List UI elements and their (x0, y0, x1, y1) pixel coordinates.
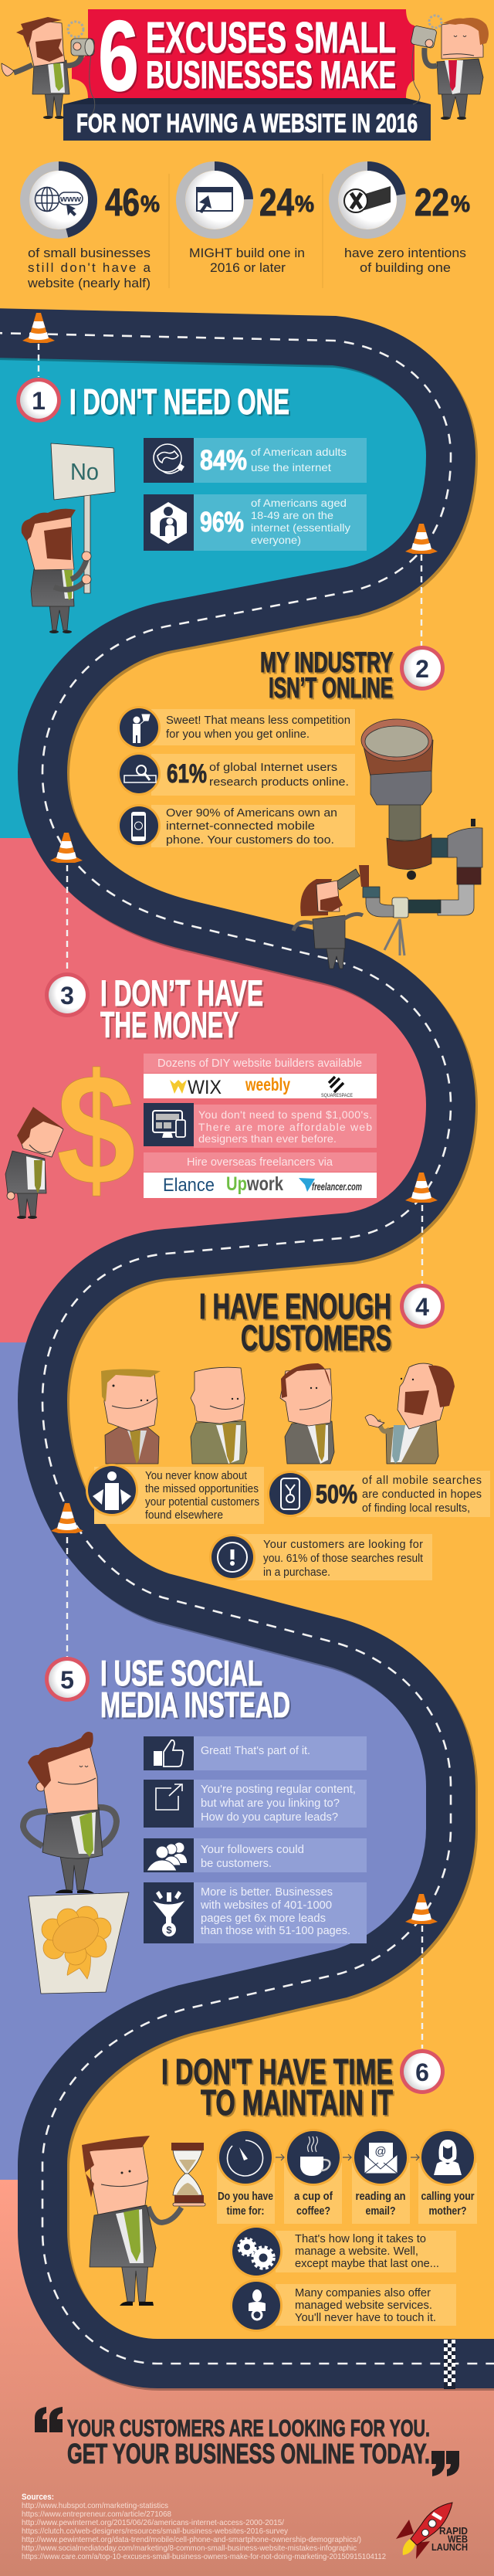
heading 3 (100, 972, 263, 1045)
badge 1 (16, 378, 61, 423)
heading 4: CUSTOMERS (241, 1318, 391, 1358)
caption: 46 percent (27, 246, 151, 290)
step: calling your mother: calling your (421, 2190, 475, 2203)
closing quote mark (431, 2451, 459, 2476)
background: salmon footer (0, 2180, 494, 2576)
step: do you have time for: Do you have (218, 2190, 273, 2203)
heading 3: THE MONEY (100, 1004, 239, 1045)
step: reading an email: @ (374, 2145, 387, 2158)
section 3: I don't have the money (5, 972, 377, 1219)
panel: overseas freelancers: Hire overseas freelancers via (187, 1156, 333, 1169)
stat: 24 percent: % (295, 192, 314, 217)
sources list: http://www.hubspot.com/marketing-statistics (22, 2501, 168, 2510)
sources list: https://www.care.com/a/top-10-excuses-small-business-owners-make-for-not-doing-marketing-20150915104112 (22, 2552, 386, 2561)
row: thumbs up: Great! That's part of it. (201, 1744, 310, 1757)
background: pink section (0, 838, 451, 1342)
stat: 24 percent: 24 (259, 181, 294, 224)
Rapid Web Launch logo: RAPID (439, 2525, 468, 2537)
row: followers: Your followers could (201, 1843, 304, 1856)
step: reading an email: reading an (355, 2190, 406, 2203)
cartoon: man holding hourglass (82, 2136, 205, 2306)
badge 6: 6 (415, 2058, 429, 2086)
row: 50% mobile searches: 50% (316, 1480, 357, 1509)
row: posting content: How do you capture leads? (201, 1811, 338, 1824)
row: followers: be customers. (201, 1857, 272, 1870)
row: 61% research products: research products online. (209, 776, 349, 789)
stat box: 96%: everyone) (251, 534, 301, 546)
stat: 22 percent: 22 (414, 181, 449, 224)
opening quote mark (35, 2407, 63, 2432)
donut: 22% (333, 166, 401, 234)
row: more is better (144, 1882, 367, 1943)
stat: 22 percent: % (451, 192, 470, 217)
row: missed opportunities: your potential customers (145, 1496, 259, 1509)
traffic cone 1 (22, 313, 55, 343)
row: less competition: Sweet! That means less competition (166, 714, 350, 727)
panel: DIY website builders: Dozens of DIY website builders available (157, 1057, 362, 1070)
row: 50% mobile searches: of all mobile searches (362, 1475, 482, 1487)
row: 50% mobile searches: are conducted in hopes (362, 1488, 482, 1501)
panel: DIY website builders: WIX (188, 1077, 222, 1098)
row: 50% mobile searches: of finding local results, (362, 1502, 470, 1515)
row: customers looking: Your customers are looking for (263, 1539, 423, 1551)
background: purple section (0, 1342, 451, 2180)
sources list: http://www.pewinternet.org/2015/06/26/americans-internet-access-2000-2015/ (22, 2518, 284, 2527)
badge 4: 4 (415, 1293, 429, 1321)
heading 2: ISN’T ONLINE (269, 672, 393, 704)
row: more is better: pages get 6x more leads (201, 1912, 326, 1925)
sources list (22, 2493, 386, 2561)
section 2: my industry isn't online (117, 646, 482, 969)
caption: 22 percent (344, 246, 466, 275)
badge 3 (45, 972, 90, 1017)
badge 5 (45, 1657, 90, 1702)
row: thumbs up (144, 1736, 367, 1770)
caption: 24 percent: 2016 or later (210, 260, 286, 275)
step: do you have time for (217, 2129, 275, 2224)
panel: affordable designers (144, 1103, 377, 1148)
panel: affordable designers: You don't need to spend $1,000's. (198, 1108, 372, 1121)
badge 6 (400, 2049, 445, 2094)
checkered finish line (444, 2340, 455, 2389)
section 1: I don't need one (16, 378, 367, 633)
stat: 46 percent: 46 (105, 181, 140, 224)
caption: 22 percent: have zero intentions (344, 246, 466, 260)
stat box: 96%: 18-49 are on the (251, 509, 333, 521)
heading 6: TO MAINTAIN IT (201, 2082, 393, 2123)
badge 2: 2 (415, 655, 429, 683)
panel: overseas freelancers (144, 1152, 377, 1198)
Rapid Web Launch logo: LAUNCH (431, 2541, 468, 2553)
traffic cone 6 (405, 1894, 438, 1924)
heading 6 (161, 2052, 393, 2123)
step: do you have time for: time for: (227, 2204, 264, 2218)
sources list: http://www.socialmediatoday.com/marketing/8-common-small-business-website-mistakes-infographic (22, 2544, 357, 2553)
step: calling your mother (418, 2129, 477, 2224)
donut: 24% (181, 166, 249, 234)
illustration: telescope and man (293, 719, 482, 969)
heading 5: MEDIA INSTEAD (100, 1685, 290, 1725)
winding road (0, 333, 494, 2366)
caption: 46 percent: still don't have a (28, 260, 151, 275)
traffic cone 5 (51, 1503, 83, 1533)
stat box: 84%: 84% (200, 444, 247, 476)
cartoon: unimpressed man with tin can (411, 15, 489, 120)
cartoon: man holding No sign: No (70, 458, 99, 485)
caption: 22 percent: of building one (360, 260, 451, 275)
panel: overseas freelancers: Elance (163, 1175, 215, 1196)
row: mobile phones: phone. Your customers do too. (166, 833, 334, 847)
row: how long it takes: except maybe that last one... (295, 2257, 439, 2270)
row: more is better: $ (166, 1924, 172, 1936)
row: missed opportunities: the missed opportunities (145, 1483, 259, 1495)
stat box: 96% (144, 494, 367, 551)
row: posting content (144, 1780, 367, 1828)
row: customers looking (209, 1534, 432, 1580)
row: managed services: You'll never have to touch it. (295, 2311, 436, 2324)
stat box: 84%: of American adults (251, 446, 347, 458)
heading 3: I DON’T HAVE (100, 972, 263, 1013)
row: managed services: managed website services. (295, 2299, 432, 2312)
heading 4 (199, 1286, 391, 1358)
row: customers looking: you. 61% of those searches result (263, 1553, 423, 1565)
step: reading an email (352, 2129, 410, 2224)
donut: 46% (25, 166, 93, 234)
dollar sign: $ (56, 1041, 136, 1218)
step: cup of coffee (284, 2129, 342, 2224)
heading 5: I USE SOCIAL (100, 1653, 262, 1693)
step: cup of coffee: coffee? (296, 2204, 330, 2218)
background: teal section (0, 333, 451, 838)
Rapid Web Launch logo (396, 2503, 468, 2559)
heading 5 (100, 1653, 290, 1725)
sources list: Sources: (22, 2493, 54, 2502)
closing quote (35, 2407, 459, 2476)
row: 50% mobile searches (267, 1471, 490, 1517)
row: 61% research products: 61% (167, 759, 207, 789)
row: more is better: than those with 51-100 pages. (201, 1924, 350, 1937)
traffic cone 2 (405, 524, 438, 554)
statistics row (25, 166, 470, 290)
panel: DIY website builders (144, 1054, 377, 1098)
step: calling your mother: mother? (429, 2204, 466, 2218)
row: followers (144, 1838, 367, 1872)
stat box: 96%: internet (essentially (251, 521, 350, 534)
heading 1: I DON'T NEED ONE (69, 382, 289, 422)
badge 5: 5 (60, 1666, 74, 1694)
badge 1: 1 (32, 387, 46, 415)
row: missed opportunities (86, 1464, 264, 1524)
badge 3: 3 (60, 982, 74, 1010)
customer B (191, 1367, 247, 1464)
panel: overseas freelancers: freelancer.com (312, 1180, 362, 1193)
title banner (63, 0, 431, 141)
heading 2: MY INDUSTRY (260, 647, 393, 678)
badge 4 (400, 1284, 445, 1329)
cartoon: shouting man with tin can (2, 17, 95, 120)
row: missed opportunities: found elsewhere (145, 1509, 223, 1522)
caption: 24 percent (189, 246, 305, 275)
row: mobile phones: Over 90% of Americans own an (166, 806, 337, 820)
section 6: I don't have time to maintain it (82, 2049, 477, 2332)
row: missed opportunities: You never know about (145, 1470, 247, 1482)
row: 61% research products: of global Internet users (209, 761, 337, 774)
sources list: http://www.pewinternet.org/data-trend/mobile/cell-phone-and-smartphone-ownership-demographics/) (22, 2535, 361, 2544)
sources list: https://clutch.co/web-designers/resources/small-business-websites-2016-survey (22, 2527, 289, 2536)
row: 61% research products (117, 752, 355, 796)
row: managed services (230, 2279, 456, 2332)
row: posting content: but what are you linking to? (201, 1797, 340, 1810)
stat box: 84% (144, 438, 367, 483)
title banner: 6 (98, 0, 139, 112)
customer C (280, 1363, 334, 1464)
caption: 24 percent: MIGHT build one in (189, 246, 305, 260)
row: how long it takes (230, 2225, 456, 2278)
row: how long it takes: manage a website. Well, (295, 2245, 418, 2258)
stat box: 96%: of Americans aged (251, 497, 347, 509)
cartoon: four customers (101, 1363, 455, 1464)
step: cup of coffee: a cup of (294, 2190, 333, 2203)
row: managed services: Many companies also offer (295, 2286, 431, 2299)
stat: 46 percent: % (140, 192, 160, 217)
section 5: I use social media instead (23, 1653, 367, 1994)
row: customers looking: in a purchase. (263, 1566, 330, 1579)
dashed connectors from cones to number badges (39, 344, 422, 2048)
donut: 46%: www (59, 195, 81, 204)
traffic cone 3 (50, 833, 83, 863)
row: how long it takes: That's how long it takes to (295, 2232, 426, 2245)
row: mobile phones: internet-connected mobile (166, 820, 315, 833)
sources list: https://www.entrepreneur.com/article/271068 (22, 2510, 171, 2519)
customer D (365, 1363, 455, 1464)
traffic cone 4 (405, 1173, 438, 1203)
panel: affordable designers: designers than ever before. (198, 1132, 337, 1145)
caption: 46 percent: of small businesses (28, 246, 151, 260)
panel: overseas freelancers: Upwork (226, 1173, 283, 1195)
badge 2 (400, 646, 445, 691)
row: posting content: You're posting regular content, (201, 1783, 356, 1796)
row: more is better: with websites of 401-1000 (200, 1899, 332, 1912)
row: less competition: for you when you get online. (166, 728, 310, 741)
heading 6: I DON'T HAVE TIME (161, 2052, 393, 2092)
panel: affordable designers: There are more affordable web (198, 1121, 372, 1133)
stat box: 84%: use the internet (251, 461, 331, 473)
heading 2 (260, 647, 393, 704)
caption: 46 percent: website (nearly half) (27, 276, 151, 290)
row: more is better: More is better. Businesses (201, 1885, 333, 1899)
step: reading an email: email? (366, 2204, 395, 2218)
cartoon: proud man on award ribbon (23, 1732, 129, 1994)
row: mobile phones (117, 804, 355, 847)
heading 4: I HAVE ENOUGH (199, 1286, 391, 1326)
row: less competition (117, 706, 355, 749)
cartoon: sad man (5, 1107, 63, 1219)
panel: DIY website builders: SQUARESPACE (321, 1094, 353, 1098)
stat box: 96%: 96% (200, 506, 244, 538)
section 4: I have enough customers (86, 1284, 490, 1580)
panel: DIY website builders: weebly (245, 1074, 290, 1095)
customer A (101, 1369, 161, 1464)
arrows between steps (276, 2154, 419, 2160)
cartoon: man holding No sign (22, 443, 115, 633)
Rapid Web Launch logo: WEB (448, 2534, 468, 2544)
